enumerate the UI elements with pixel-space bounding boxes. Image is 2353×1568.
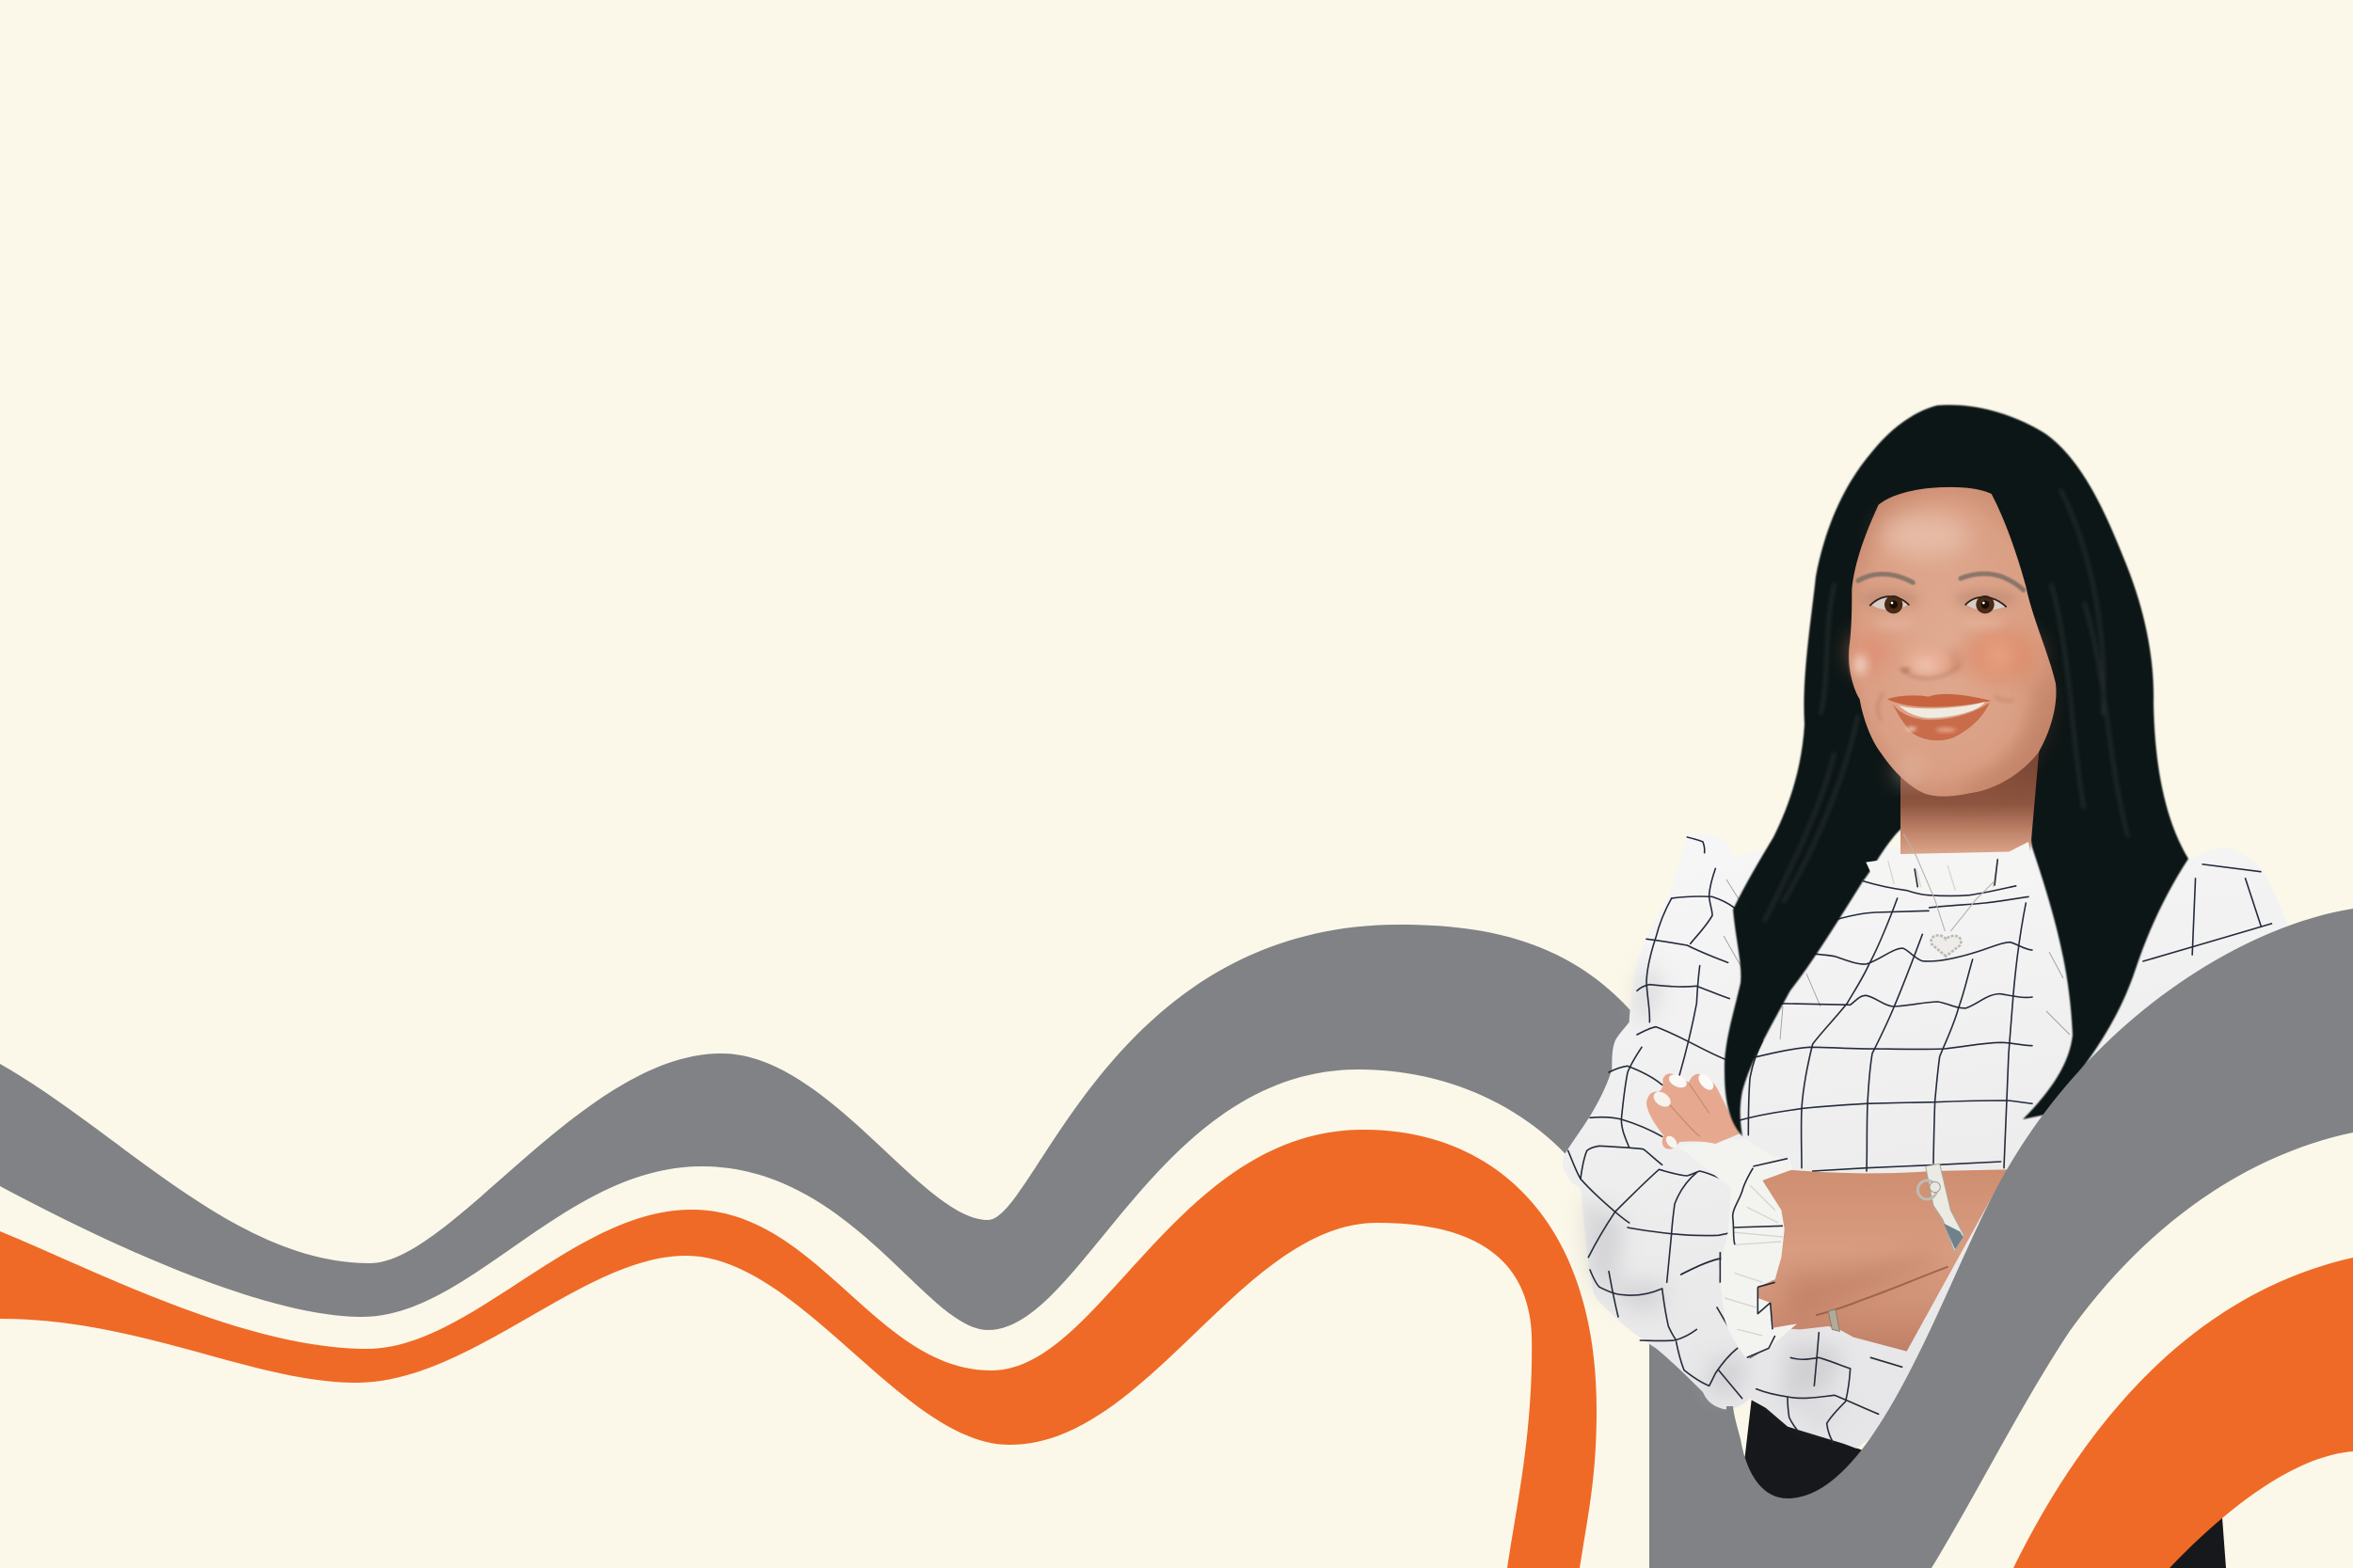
- right sleeve grid lines: [2142, 864, 2272, 961]
- hair flyaway strands: [1724, 879, 2070, 1039]
- left cheek highlight: [1854, 655, 1866, 674]
- blouse fold shadows: [1583, 962, 1851, 1423]
- blouse silhouette: [1563, 833, 2288, 1449]
- person: [1563, 405, 2288, 1568]
- skirt upper: [1743, 1400, 1875, 1502]
- collar: [1863, 842, 2037, 908]
- chin highlight: [1899, 763, 1921, 780]
- under eye right: [1962, 618, 2006, 628]
- ring: [1828, 1309, 1839, 1331]
- eye socket right: [1954, 590, 2016, 609]
- forearm: [1757, 1169, 2007, 1352]
- torso and sleeves group: [1563, 833, 2288, 1502]
- face: [1849, 487, 2057, 797]
- grey wave: front section: [1726, 909, 2353, 1568]
- lower arm shading: [1788, 1248, 1938, 1320]
- nose: [1900, 648, 1963, 678]
- forehead highlight: [1882, 515, 1969, 558]
- necklace: [1903, 834, 1995, 957]
- hair highlights: [1764, 489, 2128, 922]
- left cheek colour: [1852, 633, 1893, 671]
- cuff ruffle: [1677, 1140, 1797, 1359]
- mouth: [1887, 694, 1992, 740]
- right cheek highlight: [1985, 647, 2013, 663]
- smile lines: [1878, 693, 2013, 721]
- forearm crease: [1816, 1267, 1948, 1315]
- hand: [1646, 1071, 1740, 1150]
- lower right jaw shadow: [1963, 677, 2042, 792]
- orange wave: front section: [2013, 1258, 2353, 1568]
- grey wave: rear section behind the sleeve: [1649, 1343, 1733, 1568]
- blouse grid lines: [1590, 837, 2032, 1171]
- grey wave: [0, 925, 1684, 1330]
- neck: [1900, 743, 2040, 854]
- skirt lower: [2154, 1505, 2226, 1568]
- lower sleeve and blouse grid lines: [1568, 1146, 1902, 1442]
- eye socket left: [1860, 590, 1919, 609]
- face outline: [1849, 487, 2057, 797]
- eye left: [1869, 595, 1909, 613]
- right cheek colour: [1964, 630, 2037, 680]
- bracelet: [1917, 1164, 1963, 1252]
- under eye left: [1872, 618, 1916, 628]
- brow right: [1961, 574, 2024, 590]
- brow left: [1858, 574, 1913, 582]
- eye right: [1965, 595, 2007, 613]
- orange wave: [0, 1130, 1597, 1568]
- hair: [1725, 405, 2188, 1136]
